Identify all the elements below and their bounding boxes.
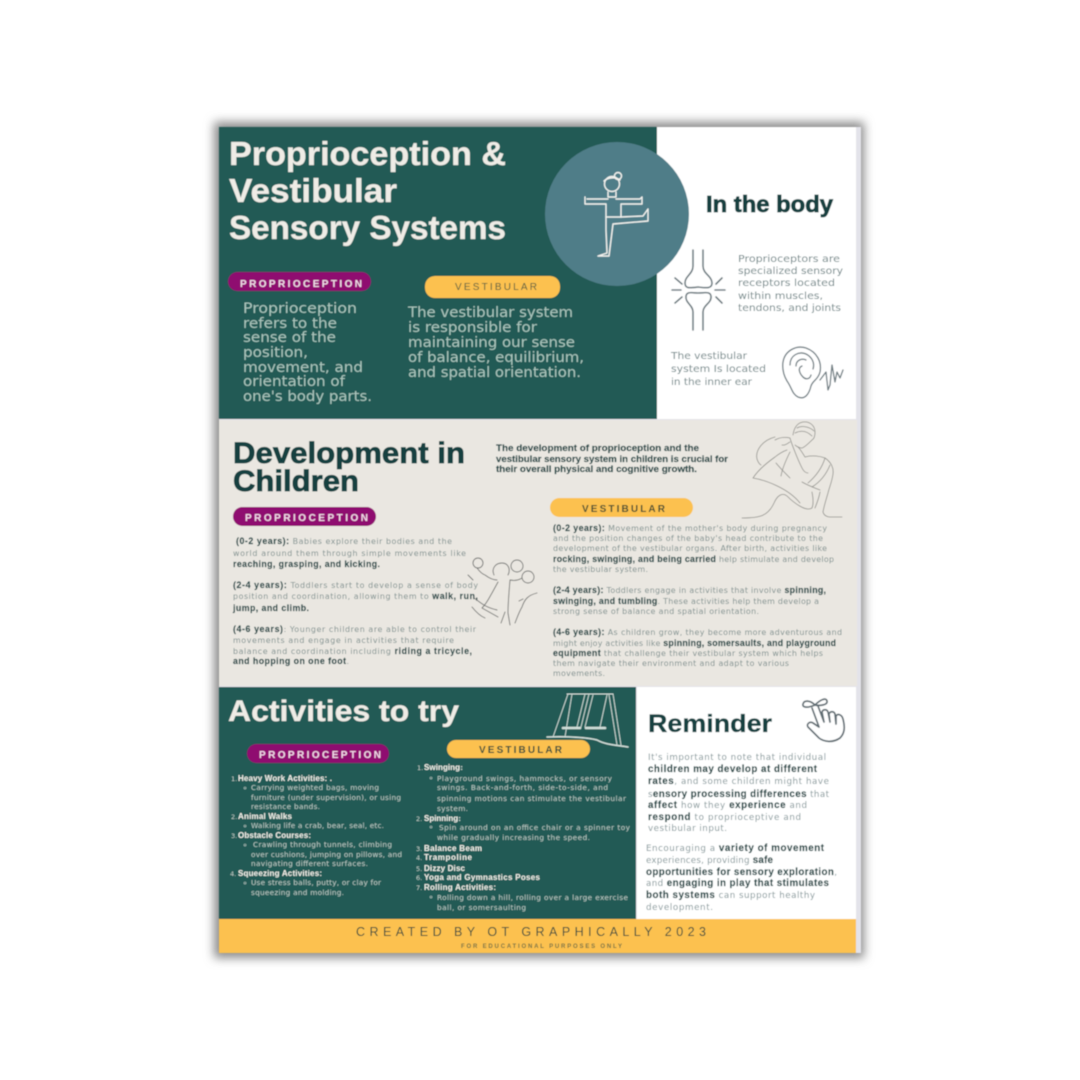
text: vestibular milestones: development of the vestibular organs. After birth, activities like <box>553 544 827 553</box>
panel: in the body <box>657 127 856 419</box>
list: vestibular activities: 7. <box>416 884 422 892</box>
label: proprioception: PROPRIOCEPTION <box>240 279 362 290</box>
text: vestibular definition: maintaining our sense <box>408 335 575 351</box>
icon: children playing line drawing <box>468 558 537 625</box>
icon: finger with tied string <box>803 699 844 741</box>
text: proprioception milestones: movements and engage in activities that require <box>233 636 454 645</box>
text: vestibular definition: and spatial orientation. <box>408 365 581 381</box>
list: vestibular activities: 1. <box>417 764 423 772</box>
label: vestibular: VESTIBULAR <box>455 282 537 293</box>
list: proprioception activities: over cushions, jumping on pillows, and <box>251 850 402 859</box>
footer band <box>219 919 856 953</box>
icon: yoga figure in circle <box>545 142 689 286</box>
list: vestibular activities: swings. Back-and-forth, side-to-side, and <box>437 783 608 792</box>
list: proprioception activities <box>230 774 402 897</box>
icon: mother and child line drawing <box>742 422 842 518</box>
label: vestibular: VESTIBULAR <box>479 745 563 756</box>
text: proprioception definition: movement, and <box>243 360 363 376</box>
text: proprioception definition: refers to the <box>243 316 337 332</box>
text: proprioceptors: tendons, and joints <box>738 303 841 314</box>
text: reminder paragraph one <box>648 753 830 834</box>
list: proprioception activities: 1. <box>231 775 237 783</box>
list: proprioception activities: Squeezing Activities: <box>238 869 322 878</box>
text: proprioception milestones: and hopping on one foot. <box>233 656 349 666</box>
list: vestibular activities: Yoga and Gymnastics Poses <box>424 873 541 882</box>
text: development intro: vestibular sensory system in children is crucial for <box>496 454 728 464</box>
list: vestibular activities: Trampoline <box>424 853 473 862</box>
list: proprioception activities: Carrying weighted bags, moving <box>251 783 379 792</box>
label: proprioception <box>247 744 389 763</box>
heading: development in children: Development in <box>233 437 465 470</box>
title: Proprioception & <box>229 135 506 172</box>
list: proprioception activities: 2. <box>231 813 237 821</box>
text: vestibular milestones: swinging, and tumbling. These activities help them develop a <box>553 596 819 606</box>
text: vestibular milestones: movements. <box>553 669 605 678</box>
text: reminder paragraph one: It's important to note that individual <box>648 753 826 763</box>
text: vestibular location: system Is located <box>671 364 766 375</box>
list: proprioception activities: Obstacle Courses: <box>238 831 311 840</box>
heading: development in children: Children <box>233 465 359 498</box>
list: vestibular activities: while gradually increasing the speed. <box>437 833 590 842</box>
list: proprioception activities: 4. <box>230 870 236 878</box>
panel: activities to try <box>219 687 636 919</box>
label: vestibular <box>447 740 590 758</box>
list: vestibular activities: spinning motions can stimulate the vestibular <box>437 794 626 803</box>
text: vestibular milestones: and the position changes of the baby's head contribute to the <box>553 534 823 543</box>
text: vestibular definition: The vestibular system <box>407 305 573 321</box>
text: vestibular milestones: (4-6 years): As children grow, they become more adventurous and <box>553 627 842 637</box>
footer: credit: CREATED BY OT GRAPHICALLY 2023 <box>356 925 706 939</box>
list: vestibular activities: Swinging: <box>424 763 463 772</box>
text: vestibular milestones: equipment that challenge their vestibular system which helps <box>553 648 823 658</box>
icon: knee joint <box>672 250 725 330</box>
text: reminder paragraph one: respond to proprioceptive and <box>648 812 801 823</box>
text: vestibular milestones <box>553 523 842 678</box>
list: vestibular activities: Spin around on an office chair or a spinner toy <box>439 823 631 832</box>
list: vestibular activities: Dizzy Disc <box>424 864 466 873</box>
list: proprioception activities: Walking life a crab, bear, seal, etc. <box>251 821 384 830</box>
text: proprioception definition: position, <box>243 345 308 361</box>
poster sheet <box>219 127 861 953</box>
text: proprioceptors: specialized sensory <box>738 266 843 277</box>
label: vestibular: VESTIBULAR <box>582 504 666 515</box>
label: proprioception <box>233 507 376 526</box>
list: proprioception activities: Heavy Work Activities: . <box>238 774 332 783</box>
text: vestibular location: The vestibular <box>670 351 748 362</box>
list: vestibular activities: Spinning: <box>424 814 461 823</box>
text: reminder paragraph one: rates, and some children might have <box>648 776 829 787</box>
text: reminder paragraph two: and engaging in play that stimulates <box>646 878 830 889</box>
list: proprioception activities: Crawling through tunnels, climbing <box>253 840 392 849</box>
text: proprioception milestones: (0-2 years): Babies explore their bodies and the <box>236 536 452 546</box>
list: proprioception activities: 3. <box>231 832 237 840</box>
text: vestibular milestones: might enjoy activities like spinning, somersaults, and playground <box>553 638 836 648</box>
text: proprioception milestones: world around them through simple movements like <box>233 549 466 558</box>
text: vestibular milestones: the vestibular system. <box>553 565 648 574</box>
icon: swing set <box>547 694 628 747</box>
list: vestibular activities: ball, or somersaulting <box>437 903 526 912</box>
text: proprioception definition <box>243 301 372 405</box>
list: vestibular activities: 6. <box>416 874 422 882</box>
text: vestibular milestones: strong sense of balance and spatial orientation. <box>553 607 759 616</box>
text: reminder paragraph two: Encouraging a variety of movement <box>646 843 825 854</box>
heading: development in children <box>233 437 465 498</box>
list: proprioception activities: furniture (under supervision), or using <box>251 793 401 802</box>
panel: header <box>219 127 657 419</box>
text: proprioceptors: Proprioceptors are <box>738 254 840 265</box>
text: vestibular milestones: (2-4 years): Toddlers engage in activities that involve spinning, <box>553 585 826 595</box>
text: reminder paragraph one: vestibular input. <box>648 824 727 834</box>
text: proprioception milestones: (2-4 years): Toddlers start to develop a sense of body <box>233 580 478 590</box>
list: proprioception activities: Use stress balls, putty, or clay for <box>251 878 381 887</box>
text: reminder paragraph two: both systems can support healthy <box>646 890 815 901</box>
text: vestibular definition: of balance, equilibrium, <box>408 350 584 366</box>
icon: ear with sound wave <box>783 347 843 398</box>
list: vestibular activities: Rolling down a hill, rolling over a large exercise <box>437 893 628 902</box>
text: vestibular location <box>670 351 766 388</box>
text: vestibular location: in the inner ear <box>671 377 753 388</box>
heading: reminder: Reminder <box>648 710 772 738</box>
list: vestibular activities: 2. <box>416 815 422 823</box>
text: reminder paragraph two: opportunities for sensory exploration, <box>646 867 837 878</box>
list: vestibular activities: 5. <box>416 865 422 873</box>
text: reminder paragraph two <box>646 843 837 913</box>
list: proprioception activities: Animal Walks <box>238 812 293 821</box>
title: Vestibular <box>229 172 397 209</box>
text: proprioceptors: receptors located <box>738 278 835 289</box>
list: vestibular activities <box>416 763 631 912</box>
text: proprioception milestones: position and coordination, allowing them to walk, run, <box>233 591 478 601</box>
text: proprioception definition: sense of the <box>243 330 336 346</box>
panel: reminder <box>637 687 856 919</box>
text: reminder paragraph two: development. <box>646 903 713 913</box>
text: proprioception definition: Proprioception <box>243 301 357 317</box>
footer: disclaimer: FOR EDUCATIONAL PURPOSES ONLY <box>461 944 622 950</box>
text: vestibular definition: is responsible for <box>408 320 537 336</box>
text: proprioception milestones: reaching, grasping, and kicking. <box>233 559 380 569</box>
text: proprioception definition: orientation of <box>243 374 346 390</box>
label: vestibular <box>550 498 693 517</box>
text: development intro <box>496 443 728 474</box>
text: proprioception milestones <box>232 536 478 666</box>
text: reminder paragraph one: affect how they experience and <box>648 800 807 811</box>
text: vestibular milestones: rocking, swinging, and being carried help stimulate and develop <box>553 554 834 564</box>
list: vestibular activities: Playground swings, hammocks, or sensory <box>437 774 613 783</box>
text: proprioception milestones: (4-6 years): Younger children are able to control their <box>233 624 477 634</box>
label: proprioception <box>228 272 371 291</box>
text: reminder paragraph one: children may develop at different <box>648 764 818 775</box>
text: development intro: The development of proprioception and the <box>496 443 699 453</box>
text: proprioceptors: within muscles, <box>738 291 823 302</box>
text: proprioception milestones: balance and coordination including riding a tricycle, <box>233 646 472 656</box>
panel: development in children <box>219 420 857 686</box>
list: proprioception activities: squeezing and molding. <box>251 888 344 897</box>
text: proprioception milestones: jump, and climb. <box>232 603 309 613</box>
text: reminder paragraph one: sensory processing differences that <box>648 789 830 800</box>
list: proprioception activities: navigating different surfaces. <box>251 859 368 868</box>
list: vestibular activities: Balance Beam <box>424 844 482 853</box>
list: vestibular activities: Rolling Activities: <box>424 883 496 892</box>
list: vestibular activities: 4. <box>416 854 422 862</box>
title <box>229 135 506 246</box>
label: proprioception: PROPRIOCEPTION <box>259 750 381 761</box>
list: vestibular activities: 3. <box>416 845 422 853</box>
text: vestibular definition <box>407 305 584 381</box>
title: Sensory Systems <box>229 209 506 246</box>
text: vestibular milestones: them navigate their environment and adapt to various <box>553 659 789 668</box>
label: vestibular <box>425 276 560 298</box>
text: vestibular milestones: (0-2 years): Movement of the mother's body during pregnancy <box>553 523 827 533</box>
label: proprioception: PROPRIOCEPTION <box>245 513 368 524</box>
heading: in the body: In the body <box>706 191 833 217</box>
list: vestibular activities: system. <box>437 804 468 813</box>
text: reminder paragraph two: experiences, providing safe <box>646 855 774 866</box>
text: proprioception definition: one's body parts. <box>243 389 372 405</box>
list: proprioception activities: resistance bands. <box>251 802 320 811</box>
text: development intro: their overall physical and cognitive growth. <box>496 464 697 474</box>
heading: activities to try: Activities to try <box>228 695 459 728</box>
text: proprioceptors <box>738 254 843 314</box>
